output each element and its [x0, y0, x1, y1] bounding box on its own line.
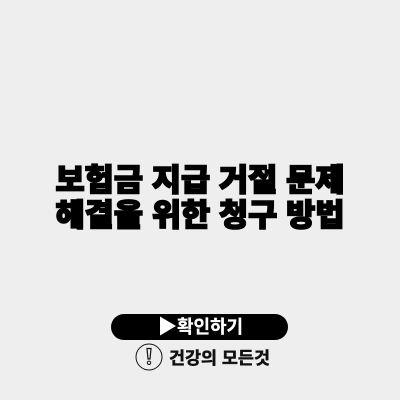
- title: 보험금 지급 거절 문제: [56, 163, 344, 198]
- title: [56, 163, 344, 233]
- title: 해결을 위한 청구 방법: [56, 198, 344, 233]
- icon: exclamation in circle: [136, 344, 162, 370]
- button: 확인하기: [111, 314, 288, 340]
- brand label: 건강의 모든것: [169, 349, 270, 368]
- button: 확인하기: 확인하기: [177, 317, 243, 337]
